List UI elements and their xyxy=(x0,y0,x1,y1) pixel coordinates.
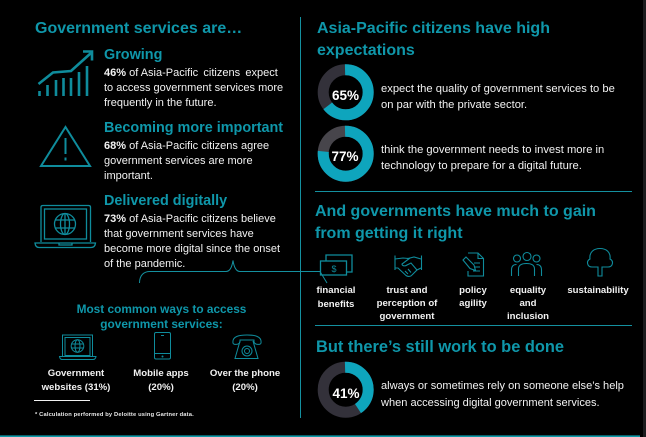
text: rely on help: when accessing digital government services. xyxy=(381,397,600,409)
heading: high expectations xyxy=(317,20,550,59)
text block: delivered digitally: that government services have xyxy=(104,228,254,240)
label: government websites xyxy=(42,368,110,393)
text block: becoming more important: important. xyxy=(104,170,153,182)
label: government websites: websites (31%) xyxy=(42,382,110,393)
heading: government services: Government services are… xyxy=(35,20,242,37)
text block: delivered digitally: become more digital since the onset xyxy=(104,243,280,255)
label: mobile apps xyxy=(133,368,189,393)
text block: delivered digitally xyxy=(104,193,280,270)
heading: much to gain: from getting it right xyxy=(315,225,463,242)
text block: growing: frequently in the future. xyxy=(104,97,217,109)
label: policy agility: agility xyxy=(459,298,487,309)
donut label: 77%: 77% xyxy=(331,149,359,164)
label: sustainability: sustainability xyxy=(567,285,629,296)
label: policy agility xyxy=(459,285,487,309)
heading: high expectations: expectations xyxy=(317,42,415,59)
text block: growing: 46% of Asia-Pacific citizens expect xyxy=(104,67,278,79)
label: policy agility: policy xyxy=(459,285,487,296)
footnote: * Calculation performed by Deloitte using Gartner data. xyxy=(35,412,194,418)
donut label: 41%: 41% xyxy=(332,386,360,401)
label: government websites: Government xyxy=(48,368,104,379)
heading: most common ways: government services: xyxy=(100,317,223,331)
text block: growing: Growing xyxy=(104,47,162,63)
text block: growing: to access government services more xyxy=(104,82,283,94)
heading: most common ways: Most common ways to access xyxy=(77,302,246,316)
text: quality of services xyxy=(381,83,615,111)
text block: becoming more important xyxy=(104,120,283,182)
text: rely on help: always or sometimes rely on someone else’s help xyxy=(381,380,624,392)
heading: high expectations: Asia-Pacific citizens have high xyxy=(317,20,550,37)
text block: becoming more important: 68% of Asia-Pacific citizens agree xyxy=(104,140,269,152)
text: invest in technology: think the government needs to invest more in xyxy=(381,144,604,156)
label: equality and inclusion: inclusion xyxy=(507,311,549,322)
text block: becoming more important: government services are more xyxy=(104,155,253,167)
label: over the phone xyxy=(210,368,280,393)
text block: delivered digitally: of the pandemic. xyxy=(104,258,185,270)
label: trust: perception of xyxy=(377,298,437,309)
label: equality and inclusion xyxy=(507,285,549,322)
label: financial benefits: financial xyxy=(317,285,355,296)
label: equality and inclusion: and xyxy=(519,298,537,309)
text block: growing xyxy=(104,47,283,109)
icon: money: $ xyxy=(331,264,337,274)
label: financial benefits: benefits xyxy=(318,299,354,310)
label: mobile apps: (20%) xyxy=(148,382,174,393)
heading: much to gain xyxy=(315,203,596,242)
label: mobile apps: Mobile apps xyxy=(133,368,189,379)
text: rely on help xyxy=(381,380,624,409)
text: quality of services: expect the quality of government services to be xyxy=(381,83,615,95)
text block: becoming more important: Becoming more important xyxy=(104,120,283,136)
label: financial benefits xyxy=(316,285,355,310)
text block: delivered digitally: 73% of Asia-Pacific citizens believe xyxy=(104,213,276,225)
label: equality and inclusion: equality xyxy=(510,285,546,296)
text: invest in technology xyxy=(381,144,604,172)
label: trust: government xyxy=(380,311,434,322)
label: trust: trust and xyxy=(386,285,428,296)
text: invest in technology: technology to prepare for a digital future. xyxy=(381,160,582,172)
text: quality of services: on par with the private sector. xyxy=(381,99,527,111)
text block: delivered digitally: Delivered digitally xyxy=(104,193,227,209)
label: over the phone: Over the phone xyxy=(210,368,280,379)
label: over the phone: (20%) xyxy=(232,382,258,393)
heading: work to be done: But there’s still work to be done xyxy=(316,338,564,356)
label: trust xyxy=(377,285,438,322)
heading: most common ways xyxy=(77,302,246,331)
heading: much to gain: And governments have much to gain xyxy=(315,203,596,220)
donut label: 65%: 65% xyxy=(332,88,359,103)
